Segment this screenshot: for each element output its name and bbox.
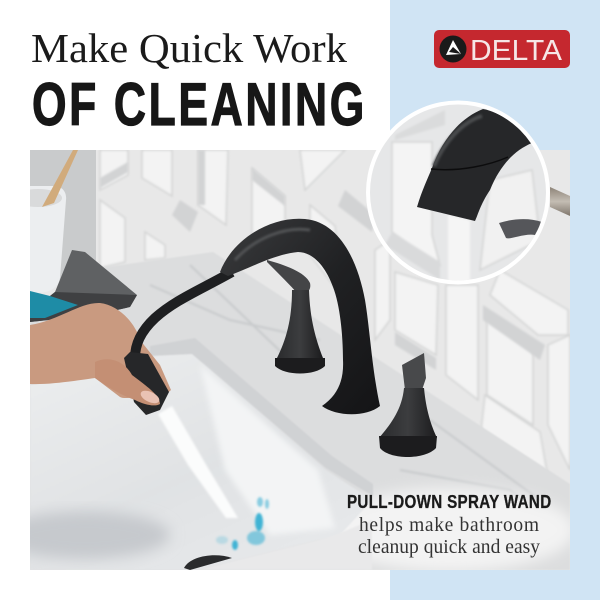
faucet spout (220, 219, 380, 414)
logo: Delta: DELTA (470, 35, 563, 67)
hose (135, 272, 232, 358)
cup (30, 186, 66, 280)
diagonal grey tile bands (100, 150, 545, 370)
sink bowl (30, 352, 372, 570)
caption line 1: helps make bathroom (359, 515, 539, 536)
water stream (158, 406, 238, 518)
logo: Delta (434, 30, 570, 68)
sink inner wall (200, 365, 335, 535)
blue side panel (390, 0, 600, 600)
magnified handle (499, 219, 542, 238)
icon: Delta prism (440, 36, 466, 62)
wall left grey (30, 150, 96, 280)
magnified spout (417, 109, 532, 221)
thumb nail (140, 390, 160, 404)
title (31, 25, 364, 139)
spout shine (434, 116, 482, 166)
hand (30, 303, 171, 400)
circle frame (366, 100, 550, 284)
soap dish base (30, 292, 137, 322)
title line 1: Make Quick Work (31, 25, 348, 71)
thumb (95, 359, 160, 405)
spout highlight (235, 229, 310, 260)
magnified tiles (385, 110, 540, 285)
marble veins (150, 265, 534, 496)
marble countertop (30, 252, 570, 570)
callout: magnified spout (366, 100, 550, 285)
left handle (267, 260, 325, 374)
sink edge (150, 338, 373, 496)
caption line 2: cleanup quick and easy (358, 537, 540, 558)
text block: feature caption (347, 492, 551, 558)
toothbrush (42, 150, 78, 207)
tile wall (30, 150, 570, 570)
spout seam (431, 157, 508, 170)
blue soap splash (216, 497, 269, 550)
spray wand head (124, 352, 169, 415)
right handle (379, 353, 437, 457)
wall tile pattern (100, 150, 570, 478)
towel bar (550, 187, 570, 216)
front counter strip (197, 520, 372, 570)
counter bottom highlight (325, 488, 575, 572)
sink shadow (0, 511, 170, 559)
cup inner rim (30, 189, 62, 207)
soap dish (30, 250, 137, 322)
caption heading: PULL-DOWN SPRAY WAND (347, 492, 551, 512)
circle interior (366, 100, 550, 285)
soap blue item (30, 291, 78, 318)
title line 2: OF CLEANING (32, 72, 364, 139)
drain (184, 555, 232, 570)
panel: bathroom photo (0, 150, 575, 572)
